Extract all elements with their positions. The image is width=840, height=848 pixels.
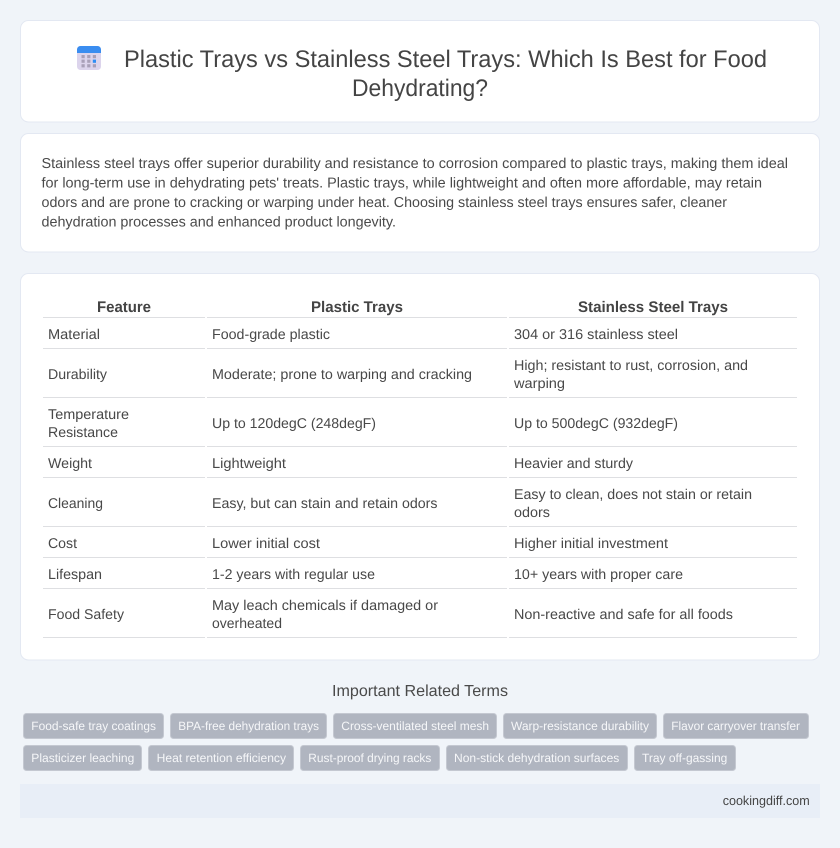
tag [664, 714, 808, 738]
row: durability: Durability [48, 367, 108, 383]
row: cost: Lower initial cost [212, 536, 320, 552]
row: food safety: May leach chemicals if damaged or [212, 598, 438, 614]
row: cleaning: Easy, but can stain and retain odors [212, 496, 438, 512]
title: Dehydrating? [352, 75, 488, 102]
row: cleaning [48, 487, 752, 521]
tag: Plasticizer leaching [31, 751, 134, 765]
row: material: Material [48, 327, 100, 343]
footer source text: cookingdiff.com [723, 793, 810, 808]
row: durability: High; resistant to rust, corrosion, and [514, 358, 748, 374]
footer [20, 784, 820, 818]
row: food safety [48, 598, 733, 632]
row: cleaning: Cleaning [48, 496, 103, 512]
panel: header [20, 20, 820, 122]
heading: related terms: Important Related Terms [332, 683, 508, 700]
tag: Heat retention efficiency [157, 751, 286, 765]
row: material [48, 327, 678, 343]
tag [24, 746, 142, 770]
row: cost: Higher initial investment [514, 536, 668, 552]
tag [634, 746, 736, 770]
row: weight [48, 456, 634, 472]
title [124, 46, 767, 102]
row: food safety: overheated [212, 616, 282, 632]
table header row: Plastic Trays [311, 299, 403, 316]
row: weight: Heavier and sturdy [514, 456, 634, 472]
tag [334, 714, 496, 738]
tag [24, 714, 164, 738]
panel: summary [20, 134, 820, 252]
row: material: Food-grade plastic [212, 327, 330, 343]
row: cost [48, 536, 668, 552]
text block: summary paragraph: odors and are prone to cracking or warping under heat. Choosing stainless steel trays ensures safer, cleaner [42, 195, 727, 211]
tag [300, 746, 440, 770]
panel: comparison table [20, 274, 820, 660]
row: temperature resistance [48, 407, 678, 441]
row: durability: warping [513, 376, 565, 392]
row: lifespan: Lifespan [48, 567, 102, 583]
tag: Flavor carryover transfer [671, 719, 800, 733]
table header row: Feature [97, 299, 151, 316]
row: temperature resistance: Temperature [48, 407, 129, 423]
row: cost: Cost [48, 536, 77, 552]
row: temperature resistance: Up to 500degC (932degF) [514, 416, 678, 432]
row: food safety: Food Safety [48, 607, 125, 623]
tag: Food-safe tray coatings [31, 719, 156, 733]
panel: related term tags [24, 714, 808, 770]
tag [446, 746, 628, 770]
tag: Warp-resistance durability [511, 719, 649, 733]
tag: BPA-free dehydration trays [178, 719, 319, 733]
row: lifespan: 1-2 years with regular use [212, 567, 375, 583]
icon: calendar [77, 46, 101, 70]
text block: summary paragraph: for long-term use in dehydrating pets' treats. Plastic trays, while lightweight and often more affordable, may retain [42, 176, 762, 192]
text block: summary paragraph: Stainless steel trays offer superior durability and resistance to corrosion compared to plastic trays, making them ideal [42, 156, 788, 172]
row: weight: Lightweight [212, 456, 286, 472]
title: Plastic Trays vs Stainless Steel Trays: Which Is Best for Food [124, 46, 767, 73]
row: temperature resistance: Resistance [48, 425, 118, 441]
row: cleaning: odors [514, 505, 550, 521]
row: food safety: Non-reactive and safe for all foods [514, 607, 733, 623]
text block: summary paragraph [42, 156, 788, 231]
tag: Rust-proof drying racks [308, 751, 431, 765]
tag [148, 746, 294, 770]
tag [504, 714, 656, 738]
row: lifespan: 10+ years with proper care [514, 567, 683, 583]
row: cleaning: Easy to clean, does not stain or retain [514, 487, 752, 503]
row: durability [48, 358, 748, 392]
table header row: Stainless Steel Trays [578, 299, 728, 316]
row: temperature resistance: Up to 120degC (248degF) [212, 416, 376, 432]
tag [170, 714, 326, 738]
row: material: 304 or 316 stainless steel [514, 327, 678, 343]
row: durability: Moderate; prone to warping and cracking [212, 367, 472, 383]
tag: Tray off-gassing [642, 751, 727, 765]
tag: Non-stick dehydration surfaces [454, 751, 619, 765]
text block: summary paragraph: dehydration processes and enhanced product longevity. [42, 215, 396, 231]
table header row [97, 299, 728, 316]
row: weight: Weight [48, 456, 92, 472]
row: lifespan [48, 567, 683, 583]
tag: Cross-ventilated steel mesh [341, 719, 489, 733]
